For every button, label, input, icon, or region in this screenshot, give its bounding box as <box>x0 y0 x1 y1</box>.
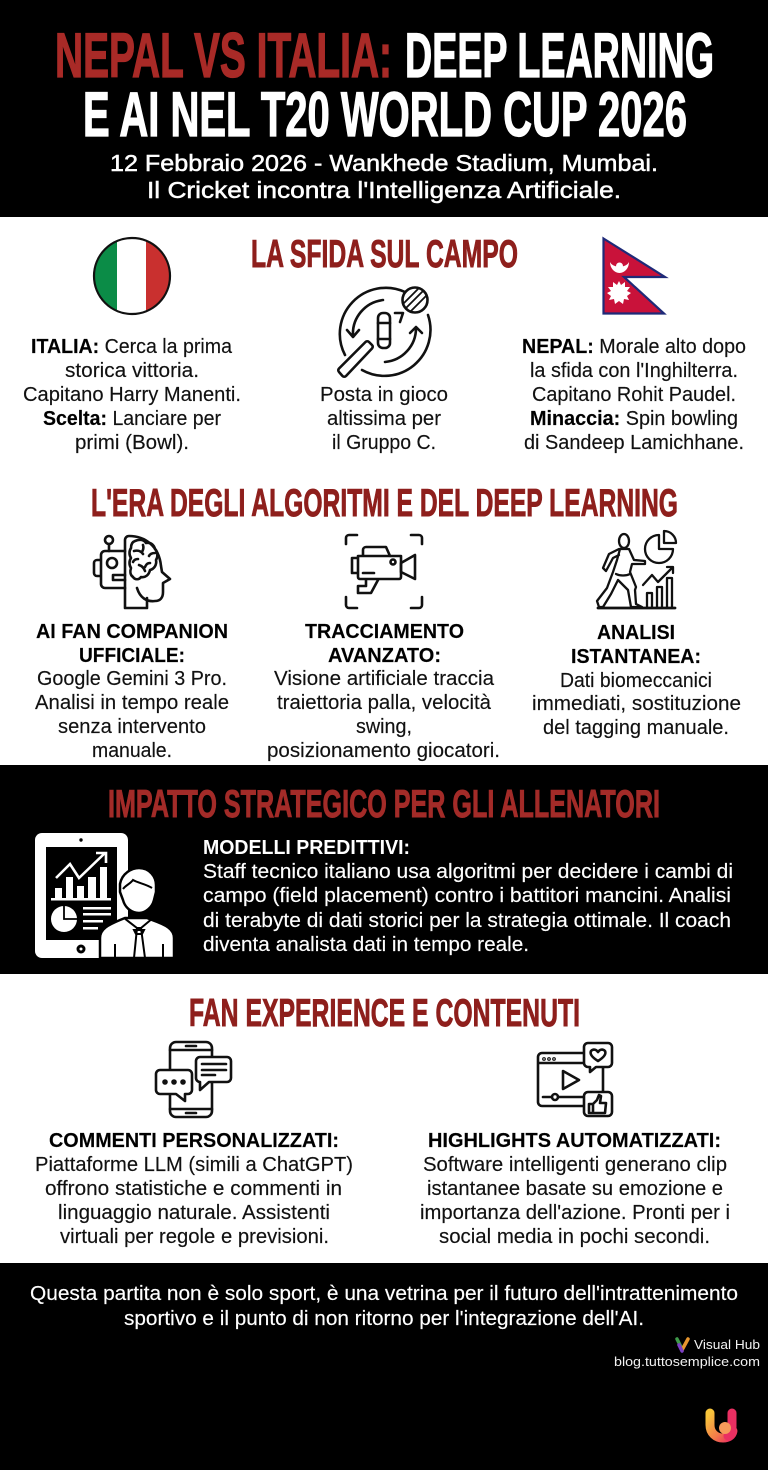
icon: video with reactions <box>538 1043 612 1116</box>
card: analisi istantanea: ANALISI <box>597 622 675 644</box>
icon: tablet with analyst <box>35 833 174 958</box>
text: Nepal: Minaccia: Spin bowling <box>530 408 738 430</box>
text: commenti personalizzati <box>35 1130 353 1248</box>
subtitle: 12 Febbraio 2026 - Wankhede Stadium, Mumbai. <box>110 150 658 176</box>
card: analisi istantanea: del tagging manuale. <box>543 717 729 739</box>
text: posta in gioco: altissima per <box>327 408 441 430</box>
card: AI fan companion <box>35 621 229 762</box>
card: analisi istantanea: ISTANTANEA: <box>571 646 701 668</box>
text: highlights automatizzati: social media in pochi secondi. <box>439 1226 710 1248</box>
text: modelli predittivi: Staff tecnico italiano usa algoritmi per decidere i cambi di <box>203 861 733 883</box>
title <box>55 21 714 150</box>
text: highlights automatizzati <box>420 1130 730 1248</box>
card: tracciamento avanzato: swing, <box>356 716 412 738</box>
text: Italia: storica vittoria. <box>65 360 199 382</box>
icon: Visual Hub logo <box>677 1339 688 1351</box>
title: NEPAL VS ITALIA: <box>55 21 392 91</box>
card: analisi istantanea: Dati biomeccanici <box>560 670 712 692</box>
panel: header <box>0 0 768 217</box>
card: analisi istantanea: immediati, sostituzione <box>532 693 741 715</box>
text: Nepal: di Sandeep Lamichhane. <box>524 432 744 454</box>
text: commenti personalizzati: offrono statistiche e commenti in <box>45 1178 342 1200</box>
card: AI fan companion: Google Gemini 3 Pro. <box>37 668 227 690</box>
text: modelli predittivi: diventa analista dati in tempo reale. <box>203 934 529 956</box>
icon: Italian flag <box>94 238 171 314</box>
closing statement: sportivo e il punto di non ritorno per l'integrazione dell'AI. <box>124 1308 644 1330</box>
text: Nepal: NEPAL: Morale alto dopo <box>522 336 746 358</box>
text: Italia: ITALIA: Cerca la prima <box>31 336 233 358</box>
icon: runner with charts <box>597 531 676 608</box>
card: AI fan companion: AI FAN COMPANION <box>36 621 228 643</box>
text: modelli predittivi: di terabyte di dati storici per la strategia ottimale. Il coach <box>203 910 731 932</box>
card: tracciamento avanzato: traiettoria palla, velocità <box>277 692 492 714</box>
card: analisi istantanea <box>532 622 741 739</box>
text: posta in gioco: Posta in gioco <box>320 384 448 406</box>
text: Nepal: Capitano Rohit Paudel. <box>532 384 736 406</box>
card: tracciamento avanzato <box>267 621 500 762</box>
panel: fan experience <box>35 992 730 1248</box>
card: tracciamento avanzato: TRACCIAMENTO <box>305 621 464 643</box>
text: Italia: Capitano Harry Manenti. <box>23 384 241 406</box>
text: commenti personalizzati: Piattaforme LLM (simili a ChatGPT) <box>35 1154 353 1176</box>
icon: corner logo <box>710 1413 733 1438</box>
text: highlights automatizzati: importanza dell'azione. Pronti per i <box>420 1202 730 1224</box>
brand text <box>614 1337 760 1369</box>
panel: era degli algoritmi <box>35 482 741 762</box>
card: tracciamento avanzato: Visione artificiale traccia <box>274 668 495 690</box>
text: Italia: primi (Bowl). <box>75 432 189 454</box>
closing statement <box>30 1283 738 1330</box>
text: modelli predittivi <box>203 837 733 956</box>
text: commenti personalizzati: virtuali per regole e previsioni. <box>60 1226 329 1248</box>
text: highlights automatizzati: HIGHLIGHTS AUTOMATIZZATI: <box>428 1130 721 1152</box>
text: posta in gioco <box>320 384 448 454</box>
icon: phone with chat bubbles <box>156 1042 231 1117</box>
panel: impatto strategico <box>0 765 768 974</box>
card: AI fan companion: manuale. <box>92 740 172 762</box>
text: commenti personalizzati: linguaggio naturale. Assistenti <box>58 1202 330 1224</box>
text: modelli predittivi: campo (field placement) contro i battitori mancini. Analisi <box>203 885 731 907</box>
card: AI fan companion: UFFICIALE: <box>79 645 185 667</box>
text: highlights automatizzati: Software intelligenti generano clip <box>423 1154 727 1176</box>
text: Nepal: la sfida con l'Inghilterra. <box>530 360 738 382</box>
closing statement: Questa partita non è solo sport, è una vetrina per il futuro dell'intrattenimento <box>30 1283 738 1305</box>
subtitle <box>110 150 658 203</box>
card: tracciamento avanzato: AVANZATO: <box>328 645 441 667</box>
brand text: blog.tuttosemplice.com <box>614 1354 760 1369</box>
subtitle: Il Cricket incontra l'Intelligenza Artificiale. <box>147 177 621 203</box>
text: highlights automatizzati: istantanee basate su emozione e <box>427 1178 723 1200</box>
panel: footer <box>0 1263 768 1470</box>
card: AI fan companion: Analisi in tempo reale <box>35 692 229 714</box>
text: Italia <box>23 336 241 454</box>
panel: la sfida sul campo <box>23 233 746 454</box>
text: commenti personalizzati: COMMENTI PERSONALIZZATI: <box>49 1130 339 1152</box>
text: posta in gioco: il Gruppo C. <box>332 432 436 454</box>
card: tracciamento avanzato: posizionamento giocatori. <box>267 740 500 762</box>
brand text: Visual Hub <box>694 1337 760 1352</box>
card: AI fan companion: senza intervento <box>58 716 206 738</box>
icon: cricket bat and ball <box>338 288 430 377</box>
icon: Nepal flag <box>604 238 665 314</box>
icon: tracking camera <box>346 535 422 608</box>
text: Nepal <box>522 336 746 454</box>
text: Italia: Scelta: Lanciare per <box>43 408 221 430</box>
icon: AI robot and brain head <box>94 536 170 608</box>
text: modelli predittivi: MODELLI PREDITTIVI: <box>203 837 410 859</box>
heading: la sfida sul campo: LA SFIDA SUL CAMPO <box>251 233 518 276</box>
